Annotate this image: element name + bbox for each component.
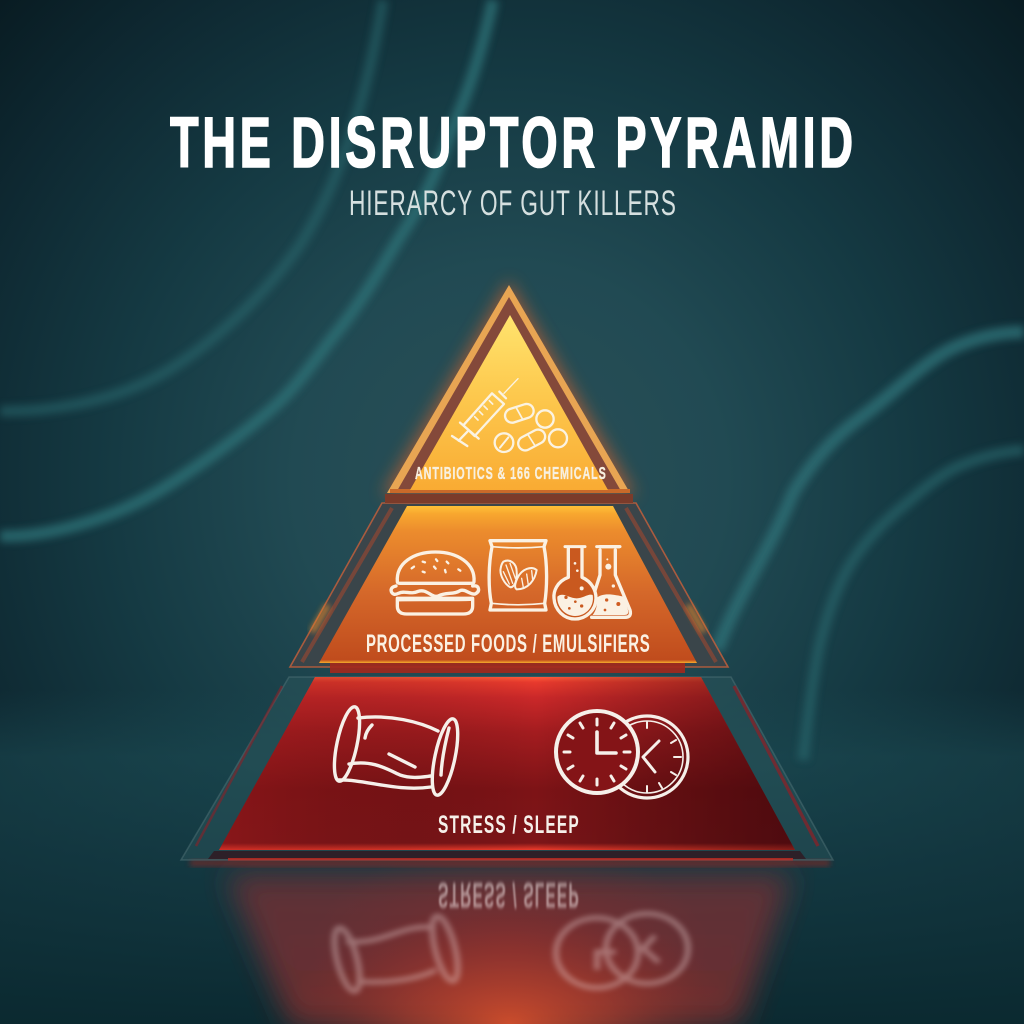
icons: [391, 541, 630, 619]
icons: [452, 379, 567, 453]
tier face: [219, 677, 795, 850]
glass frame: [290, 503, 728, 673]
icon: syringe: [452, 379, 518, 446]
label: PROCESSED FOODS / EMULSIFIERS: [366, 630, 650, 658]
glass frame: [385, 285, 633, 503]
background wisps: [0, 0, 1024, 760]
tier face: [410, 315, 608, 490]
tier 3 base: stress and sleep: [181, 677, 833, 860]
icon: pillow: [329, 705, 463, 797]
reflected label: STRESS / SLEEP: [438, 875, 579, 914]
icon: snack bag: [489, 541, 547, 610]
label: ANTIBIOTICS & 166 CHEMICALS: [415, 464, 606, 484]
tier 2: processed foods: [290, 503, 728, 673]
title: THE DISRUPTOR PYRAMID: [170, 103, 853, 182]
reflected icons: [329, 914, 688, 993]
subtitle: HIERARCY OF GUT KILLERS: [349, 184, 676, 223]
icon: overlapping clocks: [556, 711, 688, 798]
floor reflection: [190, 840, 830, 1024]
pyramid glow: [382, 280, 636, 495]
glass frame: [181, 677, 833, 860]
icon: flasks: [554, 547, 630, 619]
icon: pills: [495, 402, 567, 453]
label: STRESS / SLEEP: [438, 811, 579, 839]
tier 1: antibiotics: [385, 285, 633, 503]
icon: burger: [391, 552, 479, 614]
tier face: [319, 506, 697, 663]
